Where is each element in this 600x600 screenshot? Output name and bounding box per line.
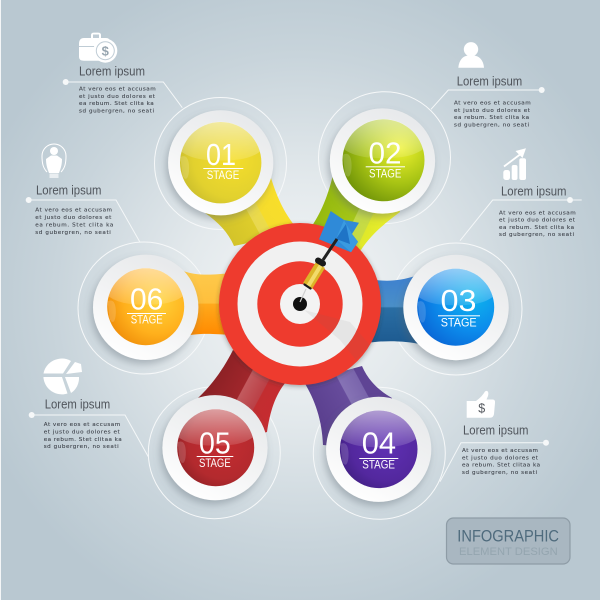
stage 02 button (330, 108, 435, 214)
stage 05 button: 05 (199, 425, 231, 460)
body text: At vero eos et accusam (44, 422, 120, 428)
badge: infographic element design: INFOGRAPHIC (457, 527, 559, 546)
stage 06 button: STAGE (131, 314, 163, 326)
body text: sd gubergren, no seati (44, 444, 119, 450)
body text: et justo duo dolores et (79, 94, 156, 100)
body text: sd gubergren, no seati (35, 230, 111, 236)
band 03 blue (368, 276, 420, 344)
stage 04 button (326, 397, 431, 502)
stage 04 button: STAGE (362, 459, 395, 471)
icon: thumbs up with dollar: $ (478, 402, 485, 416)
callout 03 (460, 148, 582, 241)
body text: sd gubergren, no seati (454, 123, 529, 129)
leader line (26, 197, 140, 242)
body text: sd gubergren, no seati (499, 232, 574, 238)
heading: Lorem ipsum (457, 74, 522, 88)
band 04 purple (304, 366, 392, 450)
heading: Lorem ipsum (45, 398, 110, 412)
body text: ea rebum. Stet clita ka (499, 225, 574, 231)
flights (319, 211, 359, 252)
callout 02 (431, 42, 545, 129)
heading: Lorem ipsum (501, 184, 566, 198)
badge: infographic element design (446, 518, 570, 564)
icon: pie chart (43, 359, 82, 394)
leader line (431, 87, 545, 109)
leader line (29, 412, 148, 457)
body text (499, 210, 576, 238)
body text: et justo duo dolores et (35, 215, 112, 221)
dart shadow (304, 310, 370, 360)
band 05 red (198, 350, 286, 447)
stage 01 button (168, 110, 273, 215)
leader line (440, 440, 549, 482)
coloured bands (183, 160, 420, 450)
body text: sd gubergren, no seati (79, 109, 154, 115)
stage 01 button: 01 (206, 137, 236, 172)
heading: Lorem ipsum (36, 184, 102, 198)
body text (44, 422, 122, 450)
callout 04 (440, 391, 549, 482)
stage 04 button: 04 (362, 425, 396, 460)
stage 03 button: 03 (440, 283, 476, 318)
stage 01 button: STAGE (207, 170, 240, 182)
leader line (63, 79, 182, 108)
body text: At vero eos et accusam (462, 448, 538, 454)
body text: sd gubergren, no seati (462, 470, 537, 476)
icon: briefcase with dollar: $ (102, 44, 110, 58)
stage 02 button: 02 (368, 135, 402, 170)
stage 05 button (162, 395, 268, 500)
body text: At vero eos et accusam (499, 210, 576, 216)
leader line (460, 197, 582, 241)
body text: et justo duo dolores et (454, 108, 531, 114)
body text (462, 448, 540, 476)
body text: ea rebum. Stet clita ka (454, 115, 529, 121)
body text: et justo duo dolores et (462, 455, 539, 461)
callout 01 (63, 33, 182, 115)
band 01 yellow (205, 163, 300, 246)
icon: person (458, 42, 484, 68)
stage 06 button: 06 (130, 281, 163, 316)
callout 05 (29, 359, 148, 457)
body text: et justo duo dolores et (499, 218, 576, 224)
stage 02 button: STAGE (369, 168, 402, 180)
body text: ea rebum. Stet clita ka (35, 222, 113, 228)
body text: ea rebum. Stet clitaa ka (44, 437, 122, 443)
heading: Lorem ipsum (79, 65, 145, 79)
band 06 orange (183, 271, 232, 335)
stage 05 button: STAGE (199, 458, 231, 470)
thin outer circles (78, 92, 522, 519)
stage 03 button (403, 255, 509, 360)
badge: infographic element design: ELEMENT DESIGN (459, 546, 558, 558)
icon: person in light bulb (42, 144, 66, 178)
target (219, 223, 381, 385)
dart (300, 211, 359, 302)
body text: et justo duo dolores et (44, 429, 120, 435)
body text: At vero eos et accusam (79, 87, 156, 93)
body text: At vero eos et accusam (35, 208, 112, 214)
body text: At vero eos et accusam (454, 101, 531, 107)
band 02 green (308, 160, 400, 268)
body text (454, 101, 531, 129)
body text: ea rebum. Stet clitaa ka (462, 463, 540, 469)
icon: growth chart (503, 148, 526, 180)
body text (35, 208, 113, 236)
body text: ea rebum. Stet clita ka (79, 101, 154, 107)
heading: Lorem ipsum (463, 424, 528, 438)
body text (79, 87, 156, 115)
callout 06 (26, 144, 140, 242)
stage 06 button (93, 255, 198, 360)
stage 03 button: STAGE (441, 318, 477, 330)
